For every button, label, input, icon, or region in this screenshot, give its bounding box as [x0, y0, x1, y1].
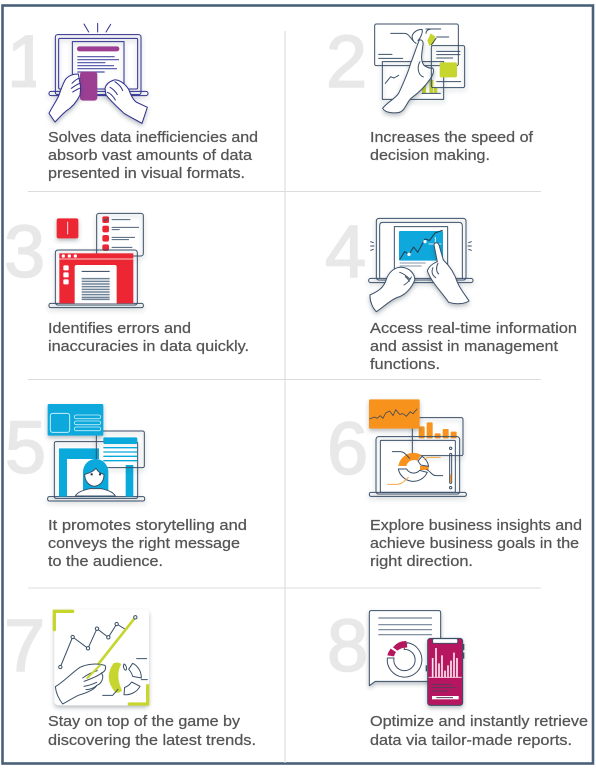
- text 2: Increases the speed of: [370, 129, 534, 146]
- text 2: [370, 129, 534, 164]
- text 4: Access real-time information: [370, 320, 577, 337]
- text 4: and assist in management: [370, 338, 559, 355]
- icon: laptop with hands: [49, 23, 148, 123]
- icon: business dashboard laptop: [369, 399, 466, 496]
- number 6: 6: [327, 407, 368, 490]
- text 6: [370, 517, 582, 570]
- text 7: [48, 713, 256, 749]
- text 5: to the audience.: [48, 553, 163, 570]
- number 2: 2: [326, 20, 367, 103]
- panel: item 2: [326, 20, 534, 164]
- text 1: [48, 129, 258, 182]
- icon: hand with trend chart: [54, 610, 149, 705]
- number 3: 3: [4, 210, 45, 293]
- text 8: Optimize and instantly retrieve: [370, 713, 588, 730]
- panel: item 6: [327, 399, 582, 570]
- text 3: [48, 320, 249, 355]
- number 1: 1: [7, 20, 48, 103]
- number 8: 8: [327, 604, 368, 687]
- text 6: achieve business goals in the: [370, 535, 579, 552]
- text 5: It promotes storytelling and: [48, 517, 247, 534]
- text 6: Explore business insights and: [370, 517, 582, 534]
- number 7: 7: [4, 604, 45, 687]
- icon: presenter with slides: [48, 404, 145, 501]
- panel: item 3: [4, 210, 249, 355]
- panel: item 5: [5, 404, 247, 570]
- number 5: 5: [5, 406, 46, 489]
- text 7: Stay on top of the game by: [48, 713, 241, 730]
- text 6: right direction.: [370, 553, 473, 570]
- number 4: 4: [325, 210, 366, 293]
- text 5: conveys the right message: [48, 535, 240, 552]
- text 2: decision making.: [370, 147, 490, 164]
- panel: item 8: [327, 604, 588, 749]
- text 1: Solves data inefficiencies and: [48, 129, 258, 146]
- text 8: [370, 713, 588, 749]
- icon: hand with documents: [375, 24, 465, 113]
- text 1: absorb vast amounts of data: [48, 147, 253, 164]
- panel: item 4: [325, 210, 577, 373]
- text 1: presented in visual formats.: [48, 165, 245, 182]
- text 8: data via tailor-made reports.: [370, 732, 572, 749]
- text 4: [370, 320, 577, 373]
- icon: laptop with error alerts: [49, 213, 143, 308]
- text 7: discovering the latest trends.: [48, 732, 256, 749]
- text 3: Identifies errors and: [48, 320, 191, 337]
- text 4: functions.: [370, 356, 440, 373]
- panel: item 1: [7, 20, 258, 182]
- text 3: inaccuracies in data quickly.: [48, 338, 249, 355]
- icon: laptop with real-time chart: [369, 218, 473, 312]
- icon: report and phone: [369, 611, 464, 705]
- text 5: [48, 517, 247, 570]
- panel: item 7: [4, 604, 256, 749]
